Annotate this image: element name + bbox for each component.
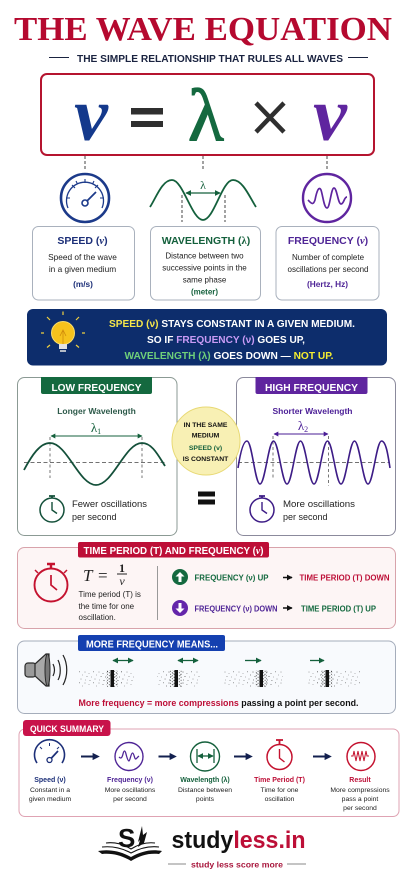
equation symbol: frequency: ν: [313, 73, 348, 157]
icon: summary speed: [35, 740, 64, 763]
heading: low frequency: [41, 377, 152, 394]
panel: wavelength card: WAVELENGTH (λ): [162, 235, 250, 247]
text: summary wavelength: points: [196, 796, 215, 803]
callout: same medium circle: [172, 407, 240, 475]
text: summary result: Result: [349, 777, 371, 784]
panel: wavelength card: successive points in the: [162, 264, 247, 272]
icon: book logo: S: [118, 823, 135, 853]
icon: light bulb: [41, 312, 85, 351]
formula: T equals 1 over v: =: [98, 566, 108, 585]
callout: same medium circle: SPEED (v): [189, 445, 222, 452]
panel: speed card: [32, 226, 134, 300]
panel: wavelength card: Distance between two: [165, 252, 244, 260]
text: summary time period: oscillation: [265, 796, 295, 803]
text: summary frequency: per second: [113, 796, 147, 803]
title: THE WAVE EQUATION: [14, 11, 392, 48]
text: summary frequency: Frequency (ν): [107, 777, 153, 784]
text: summary result: per second: [343, 805, 377, 812]
equation symbol: wavelength: λ: [188, 75, 224, 157]
text: summary wavelength: Distance between: [178, 787, 232, 794]
icon: book logo: [98, 823, 162, 861]
subtitle: THE SIMPLE RELATIONSHIP THAT RULES ALL WAVES: [77, 53, 343, 65]
heading: time period: TIME PERIOD (T) AND FREQUENCY (ν): [84, 546, 264, 557]
icon: summary wavelength: [190, 742, 220, 771]
heading: quick summary: [23, 720, 110, 736]
text: summary time period: Time Period (T): [254, 777, 305, 784]
formula: T equals 1 over v: [83, 561, 127, 588]
panel: wavelength card: same phase: [183, 276, 227, 284]
icon: up arrow: [172, 569, 188, 585]
text: summary time period: Time for one: [261, 787, 299, 794]
heading: high frequency: [256, 377, 368, 394]
panel: wavelength card: [150, 226, 260, 300]
icon: summary result: [347, 742, 375, 770]
panel: high frequency: Shorter Wavelength: [273, 406, 352, 416]
arrow: [158, 756, 175, 758]
panel: low frequency: λ: [91, 420, 97, 435]
heading: time period: [78, 542, 269, 558]
icon: down arrow: [172, 600, 188, 616]
arrow: [313, 756, 330, 758]
panel: time period: [18, 542, 396, 628]
panel: high frequency: 2: [304, 425, 308, 434]
panel: low frequency: 1: [97, 427, 101, 436]
text: summary result: [330, 777, 390, 812]
panel: speed card: Speed of the wave: [48, 252, 117, 262]
equation symbol: speed: ν: [74, 73, 109, 157]
heading: more frequency: [78, 635, 225, 651]
low frequency wave: [24, 443, 165, 485]
icon: stopwatch green: [40, 496, 64, 522]
text: summary speed: Constant in a: [30, 787, 70, 794]
text: time period definition: [78, 590, 141, 622]
icon: summary frequency: [115, 742, 143, 770]
text: compressions caption: More frequency = more compressions passing a point per second.: [78, 698, 358, 708]
panel: quick summary: [19, 720, 399, 816]
panel: high frequency: per second: [283, 512, 328, 522]
panel: equation: [41, 73, 374, 157]
arrow: [81, 756, 98, 758]
formula: T equals 1 over v: ν: [119, 574, 125, 588]
times sign: [256, 103, 284, 132]
text: frequency down relation: TIME PERIOD (T) UP: [301, 604, 376, 614]
text: summary speed: [29, 777, 71, 803]
formula: T equals 1 over v: T: [83, 566, 94, 585]
text: summary speed: Speed (ν): [34, 777, 66, 784]
callout: same medium circle: IN THE SAME: [184, 422, 228, 429]
text: summary result: pass a point: [342, 796, 378, 803]
equals sign: [131, 108, 163, 127]
high frequency wave: [238, 441, 390, 484]
callout: key idea banner: WAVELENGTH (λ) GOES DOWN — NOT UP.: [124, 351, 334, 362]
text: summary frequency: More oscillations: [105, 787, 156, 794]
panel: low frequency: [18, 377, 177, 536]
callout: key idea banner: SO IF FREQUENCY (ν) GOES UP,: [147, 335, 305, 346]
heading: more frequency: MORE FREQUENCY MEANS...: [86, 638, 218, 650]
text: summary speed: given medium: [29, 796, 71, 803]
text: time period definition: Time period (T) is: [78, 590, 141, 599]
arrow: [234, 756, 251, 758]
text: summary wavelength: Wavelength (λ): [180, 776, 230, 784]
panel: high frequency: λ: [298, 418, 304, 433]
text: frequency up relation: TIME PERIOD (T) DOWN: [300, 574, 390, 582]
logo: studyless.in: study less score more: [191, 860, 283, 870]
panel: speed card: in a given medium: [49, 264, 116, 274]
text: frequency down relation: FREQUENCY (ν) DOWN: [194, 604, 278, 614]
panel: low frequency: per second: [72, 512, 117, 522]
panel: high frequency: [236, 377, 396, 536]
callout: same medium circle: IS CONSTANT: [183, 456, 229, 463]
panel: low frequency: Longer Wavelength: [57, 406, 136, 416]
sound compressions: [78, 670, 360, 687]
icon: wavelength wave: [150, 178, 256, 222]
panel: frequency card: FREQUENCY (ν): [288, 235, 368, 247]
logo: studyless.in: [98, 823, 306, 870]
panel: speed card: SPEED (ν): [57, 235, 108, 247]
icon: speedometer: [61, 174, 109, 222]
panel: wavelength card: (meter): [191, 288, 218, 296]
panel: frequency card: Number of complete: [292, 253, 365, 262]
callout: same medium circle: MEDIUM: [192, 432, 220, 440]
panel: frequency card: [276, 226, 379, 300]
formula: T equals 1 over v: 1: [119, 561, 125, 575]
text: summary wavelength: [178, 776, 232, 803]
icon: stopwatch red: [34, 564, 68, 602]
text: time period definition: oscillation.: [78, 613, 116, 622]
text: summary frequency: [105, 777, 156, 803]
equals sign: [198, 492, 215, 504]
panel: speed card: (m/s): [73, 279, 93, 289]
panel: frequency card: oscillations per second: [288, 265, 368, 274]
heading: high frequency: HIGH FREQUENCY: [265, 382, 358, 394]
text: time period definition: the time for one: [78, 602, 135, 611]
panel: low frequency: Fewer oscillations: [72, 499, 148, 509]
icon: stopwatch purple: [250, 496, 274, 522]
icon: speaker: [25, 654, 67, 686]
compression arrows: [113, 660, 324, 662]
heading: low frequency: LOW FREQUENCY: [52, 382, 142, 394]
callout: key idea banner: SPEED (ν) STAYS CONSTANT IN A GIVEN MEDIUM.: [109, 319, 355, 330]
panel: frequency card: (Hertz, Hz): [307, 279, 348, 289]
icon: frequency wave: [303, 174, 351, 222]
panel: more frequency: [18, 635, 396, 714]
panel: high frequency: More oscillations: [283, 499, 356, 509]
text: summary time period: [254, 777, 305, 803]
heading: quick summary: QUICK SUMMARY: [30, 724, 105, 735]
icon: summary time period: [267, 740, 292, 770]
text: frequency up relation: [194, 574, 390, 582]
text: frequency down relation: [194, 604, 376, 614]
callout: key idea banner: [27, 309, 387, 366]
text: frequency up relation: FREQUENCY (ν) UP: [194, 574, 269, 582]
icon: wavelength wave: λ: [200, 178, 206, 192]
text: summary result: More compressions: [330, 787, 390, 794]
logo: studyless.in: studyless.in: [172, 827, 306, 854]
